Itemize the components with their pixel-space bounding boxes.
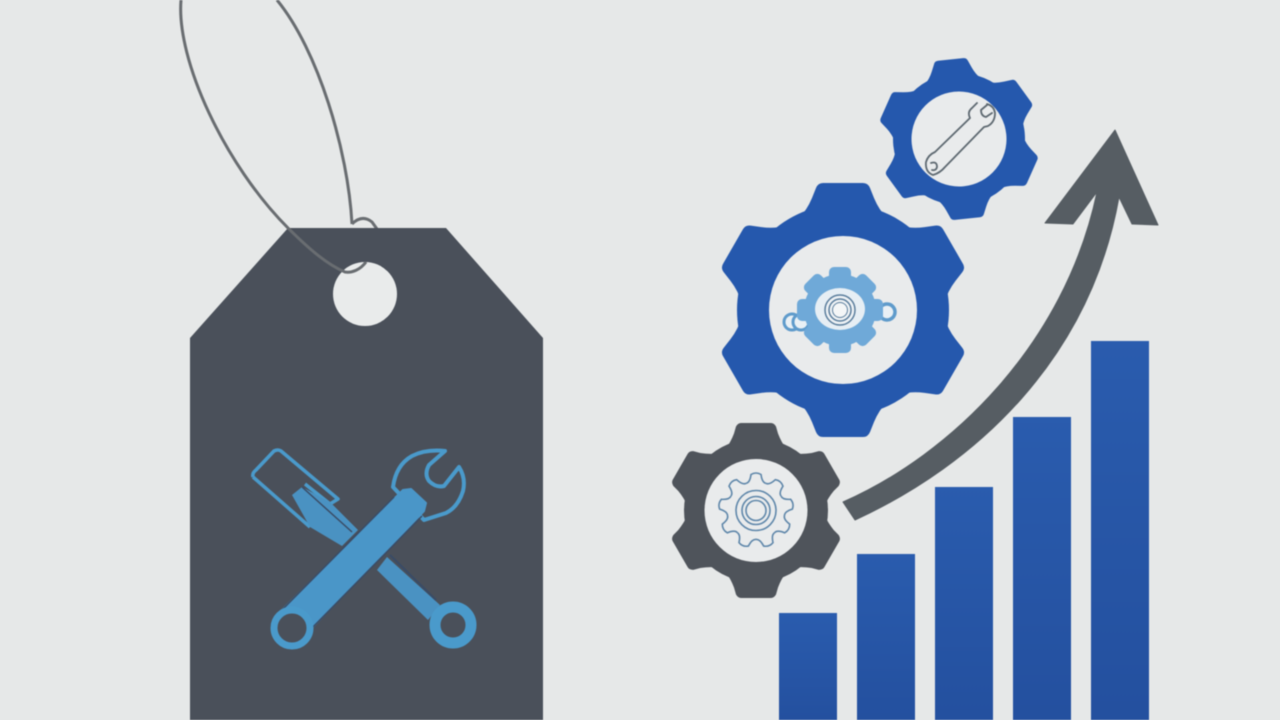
price tag <box>181 0 543 720</box>
bar 4 <box>1013 417 1071 720</box>
gear hole <box>907 87 1011 191</box>
gear: small dark <box>665 423 847 598</box>
icon: wrench outline <box>926 103 995 175</box>
string loop <box>181 0 366 272</box>
gear hole <box>769 236 917 384</box>
bar 5 <box>1091 341 1149 720</box>
arrow: rising growth curve <box>843 130 1158 520</box>
icon: crossed wrenches <box>253 450 471 646</box>
gear body <box>868 51 1050 227</box>
back tool <box>253 450 471 643</box>
gear: small blue top <box>868 51 1050 227</box>
gear body <box>711 183 975 437</box>
gear hole <box>704 459 808 562</box>
icon: outlined inner gear <box>717 473 795 549</box>
bar 2 <box>857 554 915 720</box>
bar 3 <box>935 487 993 720</box>
icon: small blue gear <box>784 267 895 353</box>
tag body <box>190 228 543 720</box>
gear body <box>665 423 847 598</box>
bar chart <box>779 341 1149 720</box>
front wrench <box>274 451 464 646</box>
tag hole <box>333 262 397 326</box>
gear: large blue <box>711 183 975 437</box>
string behind tag <box>352 218 377 229</box>
bar 1 <box>779 613 837 720</box>
